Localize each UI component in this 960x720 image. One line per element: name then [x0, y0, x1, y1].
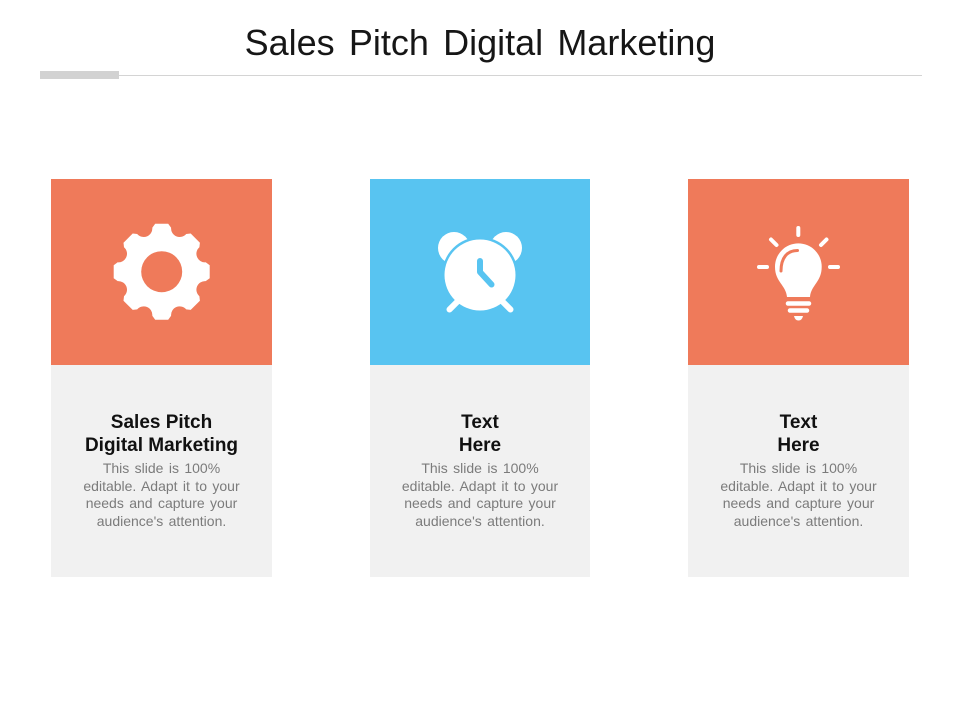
body text: editable. Adapt it to your	[720, 478, 877, 494]
body text: editable. Adapt it to your	[83, 478, 240, 494]
header block with light bulb icon	[688, 179, 909, 365]
heading: Text	[780, 412, 817, 433]
icon: alarm clock	[438, 232, 522, 312]
body text: audience's attention.	[415, 513, 545, 529]
heading	[459, 412, 501, 456]
header block with gear icon	[51, 179, 272, 365]
body text: This slide is 100%	[103, 460, 220, 476]
body text	[720, 460, 877, 529]
body text: needs and capture your	[86, 495, 237, 511]
heading: Here	[777, 435, 820, 456]
panel: sales pitch digital marketing	[51, 179, 272, 577]
body text: This slide is 100%	[740, 460, 857, 476]
heading	[85, 412, 238, 456]
body text: needs and capture your	[404, 495, 556, 511]
heading: Text	[461, 412, 499, 433]
icon: gear	[114, 224, 210, 320]
heading: Sales Pitch	[111, 412, 212, 433]
title underline	[40, 71, 922, 79]
body text: audience's attention.	[734, 513, 863, 529]
heading: Here	[459, 435, 501, 456]
header block with alarm clock icon	[370, 179, 590, 365]
title: Sales Pitch Digital Marketing	[245, 22, 715, 63]
body text	[402, 460, 558, 529]
body text: editable. Adapt it to your	[402, 478, 558, 494]
body text	[83, 460, 240, 529]
heading	[777, 412, 820, 456]
body text: This slide is 100%	[421, 460, 539, 476]
panel: text here right	[688, 179, 909, 577]
panel: text here center	[370, 179, 590, 577]
heading: Digital Marketing	[85, 435, 238, 456]
icon: light bulb	[757, 226, 840, 320]
body text: needs and capture your	[723, 495, 874, 511]
body text: audience's attention.	[97, 513, 226, 529]
